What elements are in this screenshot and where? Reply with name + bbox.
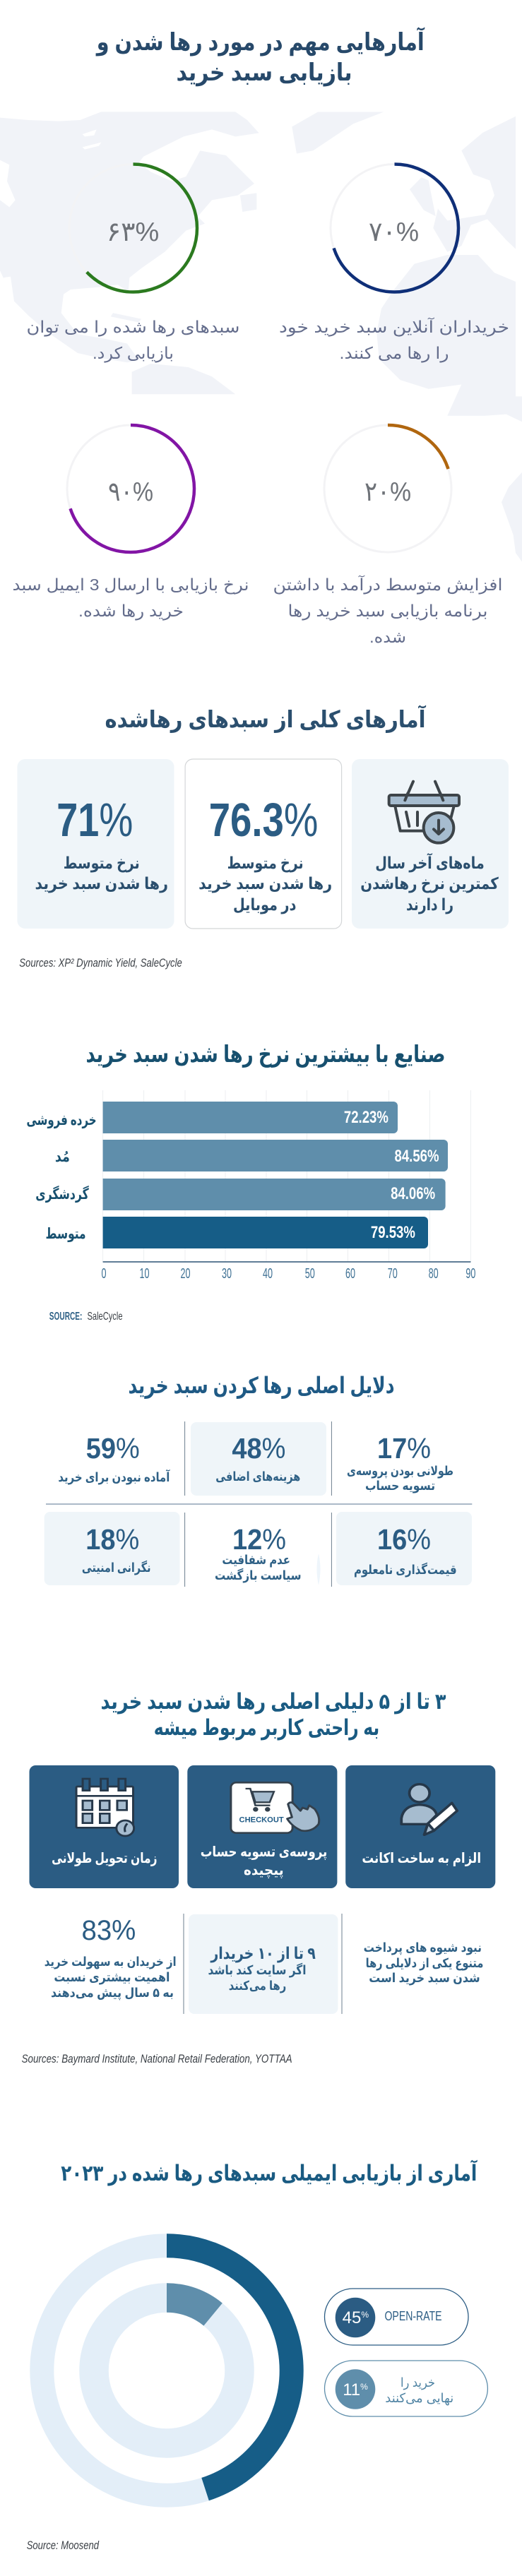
bar chart: 0 [102,1266,106,1282]
stat: 90 percent: ۹۰% [108,477,153,507]
stat: 90 percent: خرید رها شده. [78,602,184,621]
stat: 70 percent: را رها می کنند. [339,344,449,363]
stat: 70 percent [279,164,509,363]
reason: 59 percent [58,1432,170,1485]
note: 9 of 10 shoppers [184,1914,342,2014]
stat: 20 percent: ۲۰% [364,477,411,507]
stat: 63 percent: سبدهای رها شده را می توان [27,318,240,337]
card: 71 percent [17,759,174,929]
reason: 48 percent: 48% [232,1432,285,1465]
stat: 70 percent: ۷۰% [369,217,419,247]
stat: 20 percent: شده. [369,628,406,646]
reason: 18 percent: نگرانی امنیتی [82,1560,151,1575]
bar chart: متوسط [45,1226,86,1242]
bar chart: 50 [305,1266,315,1282]
legend: open rate [325,2289,468,2345]
bar chart: 84.06% [391,1184,435,1203]
reason: 18 percent: 18% [85,1523,139,1556]
reason: 17 percent: 17% [377,1432,431,1465]
reason: 16 percent [354,1523,457,1578]
card: 76.3 percent: 76.3% [209,794,318,847]
reason: 59 percent: آماده نبودن برای خرید [58,1469,170,1485]
legend: open rate: 45 [343,2308,361,2327]
bar chart: 60 [345,1266,355,1282]
card: mandatory account: الزام به ساخت اکانت [362,1851,481,1866]
card: end of year months: کمترین نرخ رهاشدن [360,874,499,893]
card: 76.3 percent: نرخ متوسط [227,854,304,873]
legend: open rate: OPEN-RATE [384,2309,442,2323]
bar chart: 20 [181,1266,191,1282]
legend: finalize purchase: % [360,2382,368,2392]
note: payment methods: نبود شیوه های پرداخت [364,1940,482,1955]
title: آمارهایی مهم در مورد رها شدن و [95,27,425,56]
title: بازیابی سبد خرید [177,59,352,87]
bar chart: 40 [263,1266,273,1282]
note: 9 of 10 shoppers: رها می‌کنند [229,1979,286,1993]
stat: 63 percent: بازیابی کرد. [93,344,174,363]
title [95,27,425,87]
legend: finalize purchase [325,2361,487,2416]
bar chart: 90 [465,1266,475,1282]
reason: 17 percent [347,1432,453,1493]
stat: 90 percent [12,425,249,621]
note: payment methods: شدن سبد خرید است [369,1971,480,1986]
heading: convenience: به راحتی کاربر مربوط میشه [154,1715,379,1741]
card: long delivery [30,1765,179,1888]
note: payment methods [364,1940,483,1986]
legend: finalize purchase: نهایی می‌کنند [385,2391,453,2406]
reason: 17 percent: تسویه حساب [365,1479,435,1493]
reason: 18 percent [82,1523,151,1575]
card: mandatory account [345,1765,495,1888]
note: 9 of 10 shoppers: ۹ تا از ۱۰ خریدار [210,1944,316,1963]
bar chart: 72.23% [344,1108,388,1127]
icon: checkout button with hand [231,1782,319,1833]
card: long delivery: زمان تحویل طولانی [52,1851,157,1866]
card: complicated checkout [187,1765,337,1888]
card: 76.3 percent: در موبایل [233,895,297,914]
card: complicated checkout: پیچیده [244,1863,284,1879]
bar chart: 10 [140,1266,150,1282]
source: convenience: Sources: Baymard Institute, National Retail Federation, YOTTAA [22,2052,292,2065]
card: 71 percent: 71% [57,794,133,847]
card: end of year months [352,759,509,929]
reason: 12 percent [215,1523,302,1582]
bar chart: 70 [388,1266,398,1282]
heading: overall stats: آمارهای کلی از سبدهای رهاشده [105,705,426,733]
card: 76.3 percent [185,759,342,929]
card: complicated checkout: پروسه‌ی تسویه حساب [201,1844,327,1861]
bar chart: 30 [222,1266,232,1282]
background world map [0,112,522,562]
card: 76.3 percent: رها شدن سبد خرید [198,874,332,893]
note: 83 percent: اهمیت بیشتری نسبت [54,1970,170,1985]
bar chart: مُد [55,1149,70,1165]
icon: checkout button with hand: CHECKOUT [239,1816,284,1824]
stat: 63 percent: ۶۳% [107,217,159,247]
bar chart [27,1090,475,1282]
bar chart: 84.56% [394,1147,439,1166]
stat: 90 percent: نرخ بازیابی با ارسال 3 ایمیل سبد [12,576,249,595]
source: industries: SaleCycle [88,1311,123,1323]
note: 83 percent: از خریدان به سهولت خرید [45,1955,177,1969]
reason: 12 percent: سیاست بازگشت [215,1568,302,1582]
card: 71 percent: نرخ متوسط [64,854,140,873]
reason: 12 percent: عدم شفافیت [222,1553,290,1567]
icon: basket with down arrow [389,782,459,843]
reasons grid [45,1421,472,1587]
stat: 70 percent: خریداران آنلاین سبد خرید خود [279,317,509,337]
heading: reasons: دلایل اصلی رها کردن سبد خرید [129,1373,394,1399]
note: 83 percent: 83% [82,1915,136,1946]
stat: 63 percent [27,164,240,363]
card: end of year months: ماه‌های آخر سال [375,852,485,873]
stat: 20 percent [273,425,503,646]
bar chart: گردشگری [35,1185,89,1203]
source: email recovery: Source: Moosend [27,2539,99,2552]
legend: finalize purchase: خرید را [401,2375,435,2390]
reason: 12 percent: 12% [232,1523,286,1556]
reason: 48 percent: هزینه‌های اضافی [215,1469,300,1484]
bar chart: 80 [429,1266,439,1282]
icon: calendar [76,1779,134,1836]
reason: 17 percent: طولانی بودن پروسه‌ی [347,1464,453,1479]
source: industries: SOURCE: [49,1311,82,1323]
note: 83 percent [45,1915,177,2000]
card: 71 percent: رها شدن سبد خرید [35,874,168,893]
legend: open rate: % [361,2310,369,2320]
icon: user with pencil [401,1784,457,1835]
bar chart: 79.53% [371,1223,415,1242]
reason: 16 percent: 16% [377,1523,431,1556]
stat: 20 percent: افزایش متوسط درآمد با داشتن [273,575,503,595]
heading: convenience [100,1689,446,1741]
reason: 16 percent: قیمت‌گذاری نامعلوم [354,1562,457,1578]
source: overall stats: Sources: XP² Dynamic Yield, SaleCycle [19,956,182,970]
bar chart: خرده فروشی [27,1112,96,1128]
note: payment methods: متنوع یکی از دلایلی رها [366,1956,483,1971]
reason: 48 percent [215,1432,300,1484]
note: 9 of 10 shoppers: اگر سایت کند باشد [208,1962,307,1978]
stat: 20 percent: برنامه بازیابی سبد خرید رها [288,602,487,621]
heading: convenience: ۳ تا از ۵ دلیلی اصلی رها شدن سبد خرید [100,1689,446,1715]
note: 83 percent: به ۵ سال پیش می‌دهند [51,1986,174,2000]
reason: 59 percent: 59% [86,1432,140,1465]
donut chart [42,2246,292,2496]
card: end of year months: را دارند [406,895,453,914]
legend: finalize purchase: 11 [343,2380,360,2399]
